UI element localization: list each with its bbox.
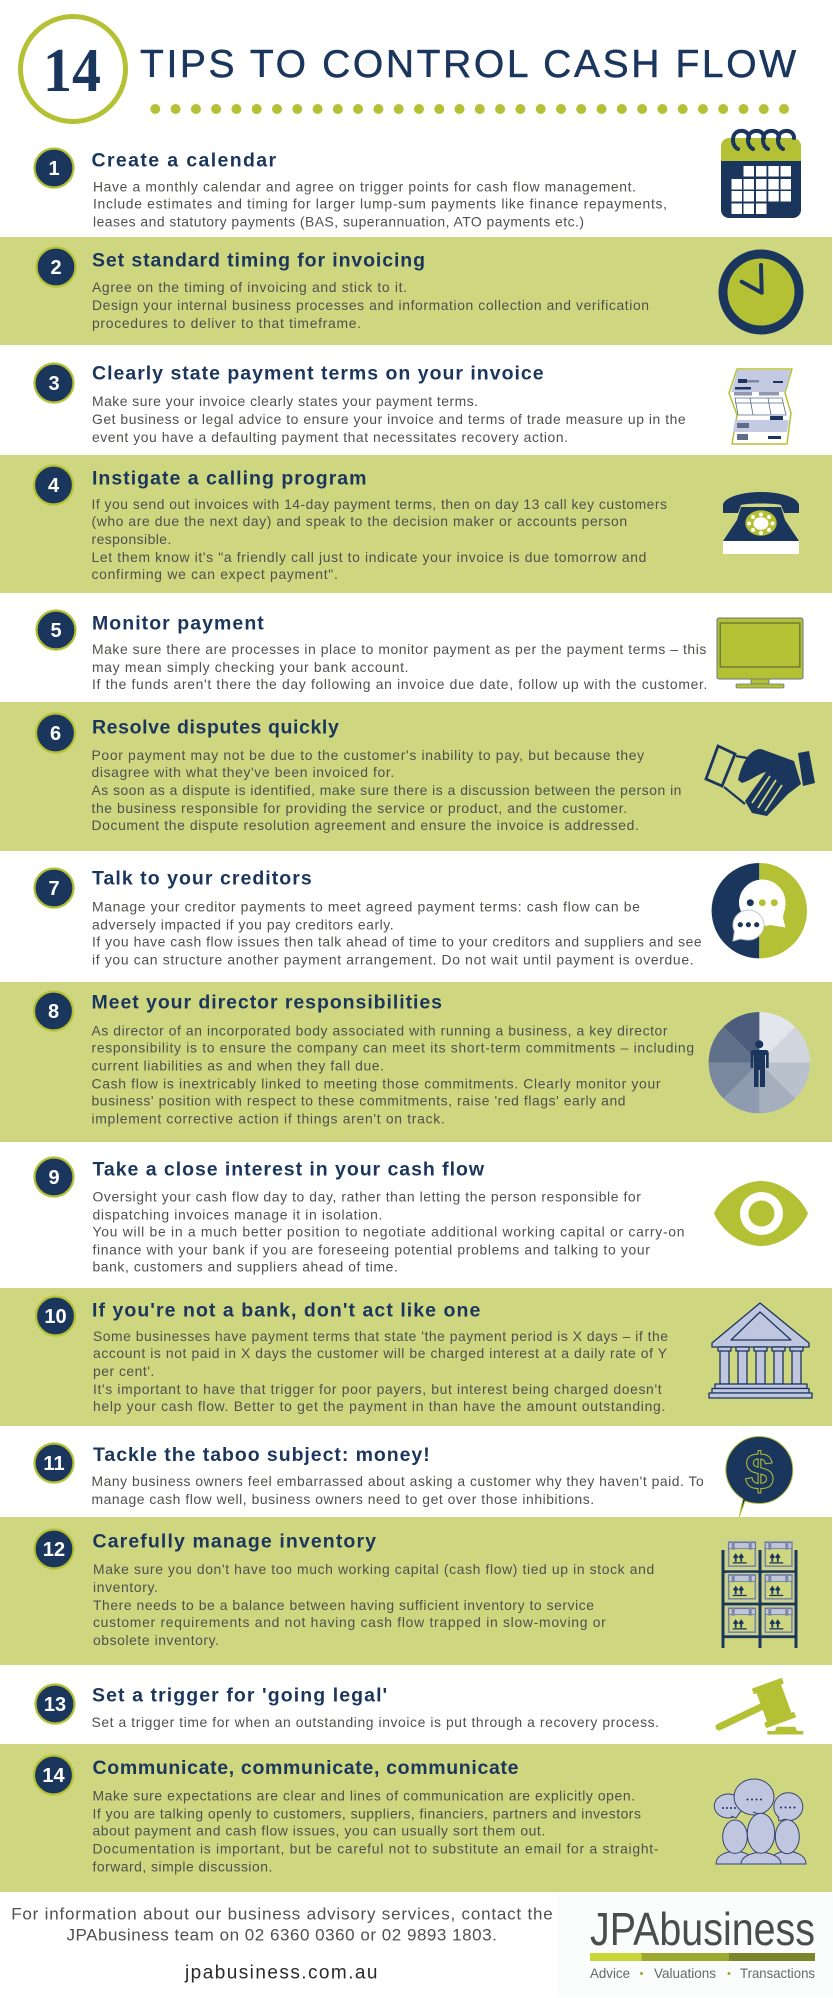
body 10: [93, 1328, 668, 1414]
icon: inventory shelves: [722, 1541, 798, 1648]
number badge 11: [34, 1444, 74, 1482]
body 5: [92, 641, 707, 692]
heading 6: Resolve disputes quickly: [92, 716, 339, 738]
panel: tip 7: [34, 863, 807, 968]
body 13: Set a trigger time for when an outstanding invoice is put through a recovery process.: [92, 1714, 659, 1730]
band 6: [0, 702, 832, 851]
footer contact text: JPAbusiness team on 02 6360 0360 or 02 9893 1803.: [66, 1926, 497, 1945]
icon: invoice: [729, 369, 792, 444]
heading 10: If you're not a bank, don't act like one: [92, 1299, 480, 1321]
body 2: [92, 279, 649, 331]
number badge 13: 13: [44, 1694, 66, 1716]
icon: telephone: [723, 492, 799, 554]
body 11: Many business owners feel embarrassed about asking a customer why they haven't paid. To: [92, 1473, 704, 1489]
body 14: forward, simple discussion.: [92, 1858, 272, 1874]
body 12: There needs to be a balance between having sufficient inventory to service: [93, 1597, 594, 1613]
heading 2: Set standard timing for invoicing: [92, 250, 425, 272]
badge: 14 in ring: 14: [43, 37, 101, 105]
body 8: current liabilities as and when they fall due.: [92, 1058, 384, 1074]
body 11: manage cash flow well, business owners need to get over those inhibitions.: [92, 1491, 594, 1507]
body 6: Poor payment may not be due to the customer's inability to pay, but because they: [92, 747, 644, 763]
icon: eye: [714, 1181, 808, 1246]
badge: 14 in ring: [20, 16, 126, 122]
body 3: event you have a defaulting payment that necessitates recovery action.: [92, 429, 568, 445]
body 8: [92, 1022, 694, 1126]
icon: people talking: [714, 1779, 806, 1864]
body 3: [92, 393, 686, 445]
body 5: Make sure there are processes in place to monitor payment as per the payment terms – this: [92, 641, 706, 657]
band 12: [0, 1517, 832, 1665]
band 4: [0, 455, 832, 593]
number badge 12: [34, 1530, 74, 1568]
body 9: bank, customers and suppliers ahead of time.: [92, 1258, 398, 1274]
number badge 9: [34, 1158, 74, 1196]
body 9: [92, 1188, 684, 1274]
body 5: If the funds aren't there the day following an invoice due date, follow up with the customer.: [92, 676, 707, 692]
panel: tip 2: [0, 237, 832, 345]
number badge 6: 6: [50, 723, 61, 745]
number badge 11: 11: [43, 1453, 65, 1475]
icon: gavel: [719, 1678, 803, 1734]
number badge 9: 9: [48, 1167, 60, 1189]
icon: calendar: [721, 131, 801, 218]
body 8: implement corrective action if things aren't on track.: [92, 1110, 445, 1126]
logo: JPAbusiness: Valuations: [654, 1965, 716, 1981]
body 1: Include estimates and timing for larger lump-sum payments like finance repayments,: [93, 196, 667, 212]
body 12: inventory.: [93, 1579, 158, 1595]
number badge 3: 3: [48, 373, 60, 395]
body 8: responsibility is to ensure the company can meet its short-term commitments – including: [92, 1040, 694, 1056]
body 7: if you can structure another payment arrangement. Do not wait until payment is overdue.: [92, 952, 694, 968]
body 10: account is not paid in X days the customer will be charged interest at a daily rate of Y: [93, 1345, 667, 1361]
body 9: You will be in a much better position to negotiate additional working capital or carry-on: [92, 1224, 684, 1240]
body 14: [92, 1788, 659, 1874]
icon: bank: [709, 1303, 812, 1398]
body 8: business' position with respect to these commitments, raise 'red flags' early and: [92, 1092, 626, 1108]
body 7: adversely impacted if you pay creditors early.: [92, 916, 394, 932]
panel: tip 11: [34, 1436, 793, 1517]
heading 5: Monitor payment: [92, 612, 264, 634]
panel: tip 8: [0, 982, 832, 1142]
panel: tip 5: [36, 610, 803, 692]
body 4: responsible.: [92, 531, 171, 547]
band 8: [0, 982, 832, 1142]
number badge 5: 5: [50, 620, 62, 642]
heading 9: Take a close interest in your cash flow: [92, 1158, 485, 1180]
footer contact text: For information about our business advisory services, contact the: [11, 1904, 553, 1923]
number badge 8: [34, 992, 73, 1030]
body 10: Some businesses have payment terms that state 'the payment period is X days – if the: [93, 1328, 668, 1344]
body 11: [92, 1473, 704, 1507]
logo: JPAbusiness: Transactions: [740, 1965, 815, 1981]
band 14: [0, 1744, 832, 1892]
body 12: customer requirements and not having cash flow trapped in slow-moving or: [93, 1614, 606, 1630]
icon: person in pie wheel: [709, 1012, 810, 1113]
panel: tip 12: [0, 1517, 832, 1665]
number badge 1: [34, 148, 74, 188]
title: TIPS TO CONTROL CASH FLOW: [140, 43, 796, 86]
number badge 13: [36, 1684, 74, 1724]
body 4: [92, 496, 667, 582]
body 10: It's important to have that trigger for poor payers, but interest being charged doesn't: [93, 1381, 662, 1397]
number badge 14: 14: [42, 1765, 65, 1787]
body 4: If you send out invoices with 14-day payment terms, then on day 13 call key customers: [92, 496, 667, 512]
body 10: per cent'.: [93, 1363, 154, 1379]
body 4: (who are due the next day) and speak to the decision maker or accounts person: [92, 513, 627, 529]
band 2: [0, 237, 832, 345]
body 6: [92, 747, 681, 833]
number badge 10: [36, 1296, 75, 1336]
number badge 12: 12: [43, 1539, 65, 1561]
dotted divider: [150, 104, 789, 114]
band 10: [0, 1288, 832, 1426]
body 2: Agree on the timing of invoicing and stick to it.: [92, 279, 407, 295]
number badge 3: [34, 364, 74, 402]
heading 11: Tackle the taboo subject: money!: [93, 1444, 430, 1466]
body 6: As soon as a dispute is identified, make sure there is a discussion between the person in: [92, 782, 681, 798]
heading 12: Carefully manage inventory: [92, 1531, 376, 1553]
body 12: obsolete inventory.: [93, 1632, 219, 1648]
icon: dollar speech bubble: $: [745, 1443, 774, 1501]
heading 7: Talk to your creditors: [92, 868, 312, 890]
number badge 5: [36, 610, 76, 650]
body 9: Oversight your cash flow day to day, rather than letting the person responsible for: [92, 1188, 641, 1204]
panel: tip 10: [0, 1288, 832, 1426]
body 4: Let them know it's "a friendly call just to indicate your invoice is due tomorrow and: [92, 549, 646, 565]
website: jpabusiness.com.au: [184, 1962, 378, 1983]
heading 14: Communicate, communicate, communicate: [92, 1757, 519, 1779]
body 12: Make sure you don't have too much working capital (cash flow) tied up in stock and: [93, 1561, 654, 1577]
body 9: dispatching invoices manage it in isolation.: [92, 1206, 382, 1222]
body 8: Cash flow is inextricably linked to meeting those commitments. Clearly monitor your: [92, 1076, 661, 1092]
body 14: If you are talking openly to customers, suppliers, financiers, partners and investors: [92, 1806, 641, 1822]
body 14: about payment and cash flow issues, you can usually sort them out.: [92, 1822, 545, 1838]
heading 13: Set a trigger for 'going legal': [92, 1685, 387, 1707]
number badge 4: 4: [48, 475, 60, 497]
body 7: [92, 898, 702, 968]
body 6: Document the dispute resolution agreement and ensure the invoice is addressed.: [92, 817, 639, 833]
heading 4: Instigate a calling program: [92, 467, 366, 489]
body 7: Manage your creditor payments to meet agreed payment terms: cash flow can be: [92, 898, 640, 914]
number badge 2: [36, 248, 76, 286]
body 8: As director of an incorporated body associated with running a business, a key director: [92, 1022, 668, 1038]
panel: tip 9: [34, 1158, 808, 1274]
body 1: [93, 178, 667, 230]
panel: tip 1: [34, 131, 801, 230]
logo: JPAbusiness: [557, 1893, 833, 1996]
footer contact text: [11, 1904, 553, 1983]
logo: JPAbusiness: Advice: [590, 1965, 630, 1981]
number badge 1: 1: [48, 158, 60, 180]
body 12: [93, 1561, 654, 1648]
body 3: Make sure your invoice clearly states your payment terms.: [92, 393, 478, 409]
number badge 2: 2: [50, 257, 62, 279]
body 5: may mean simply checking your bank account.: [92, 659, 408, 675]
icon: dollar speech bubble: [726, 1436, 793, 1517]
body 1: leases and statutory payments (BAS, superannuation, ATO payments etc.): [93, 214, 584, 230]
number badge 7: 7: [48, 878, 60, 900]
number badge 4: [34, 466, 73, 504]
heading 1: Create a calendar: [92, 150, 277, 172]
body 7: If you have cash flow issues then talk ahead of time to your creditors and suppliers and see: [92, 934, 702, 950]
heading 8: Meet your director responsibilities: [92, 992, 442, 1014]
body 2: procedures to deliver to that timeframe.: [92, 315, 361, 331]
body 10: help your cash flow. Better to get the payment in than have the amount outstanding.: [93, 1398, 665, 1414]
number badge 6: [36, 714, 75, 752]
body 4: confirming we can expect payment".: [92, 566, 338, 582]
number badge 7: [34, 868, 74, 908]
body 6: disagree with what they've been invoiced for.: [92, 764, 394, 780]
panel: tip 14: [0, 1744, 832, 1892]
panel: tip 4: [0, 455, 832, 593]
icon: chat bubbles: [712, 863, 807, 958]
panel: tip 13: [36, 1678, 803, 1734]
number badge 14: [34, 1756, 73, 1794]
heading 3: Clearly state payment terms on your invoice: [92, 362, 544, 384]
body 14: Make sure expectations are clear and lines of communication are explicitly open.: [92, 1788, 635, 1804]
body 2: Design your internal business processes and information collection and verification: [92, 297, 649, 313]
icon: handshake: [706, 746, 815, 816]
icon: monitor: [717, 618, 803, 688]
body 1: Have a monthly calendar and agree on trigger points for cash flow management.: [93, 178, 636, 194]
number badge 10: 10: [44, 1306, 67, 1328]
panel: tip 3: [34, 362, 792, 445]
icon: clock: [723, 254, 799, 330]
number badge 8: 8: [48, 1001, 59, 1023]
body 3: Get business or legal advice to ensure your invoice and terms of trade measure up in the: [92, 411, 686, 427]
panel: tip 6: [0, 702, 832, 851]
header: [20, 16, 796, 122]
body 9: finance with your bank if you are foreseeing potential problems and talking to your: [92, 1242, 650, 1258]
body 6: the business responsible for providing the service or product, and the customer.: [92, 800, 627, 816]
body 14: Documentation is important, but be careful not to substitute an email for a straight-: [92, 1840, 659, 1856]
